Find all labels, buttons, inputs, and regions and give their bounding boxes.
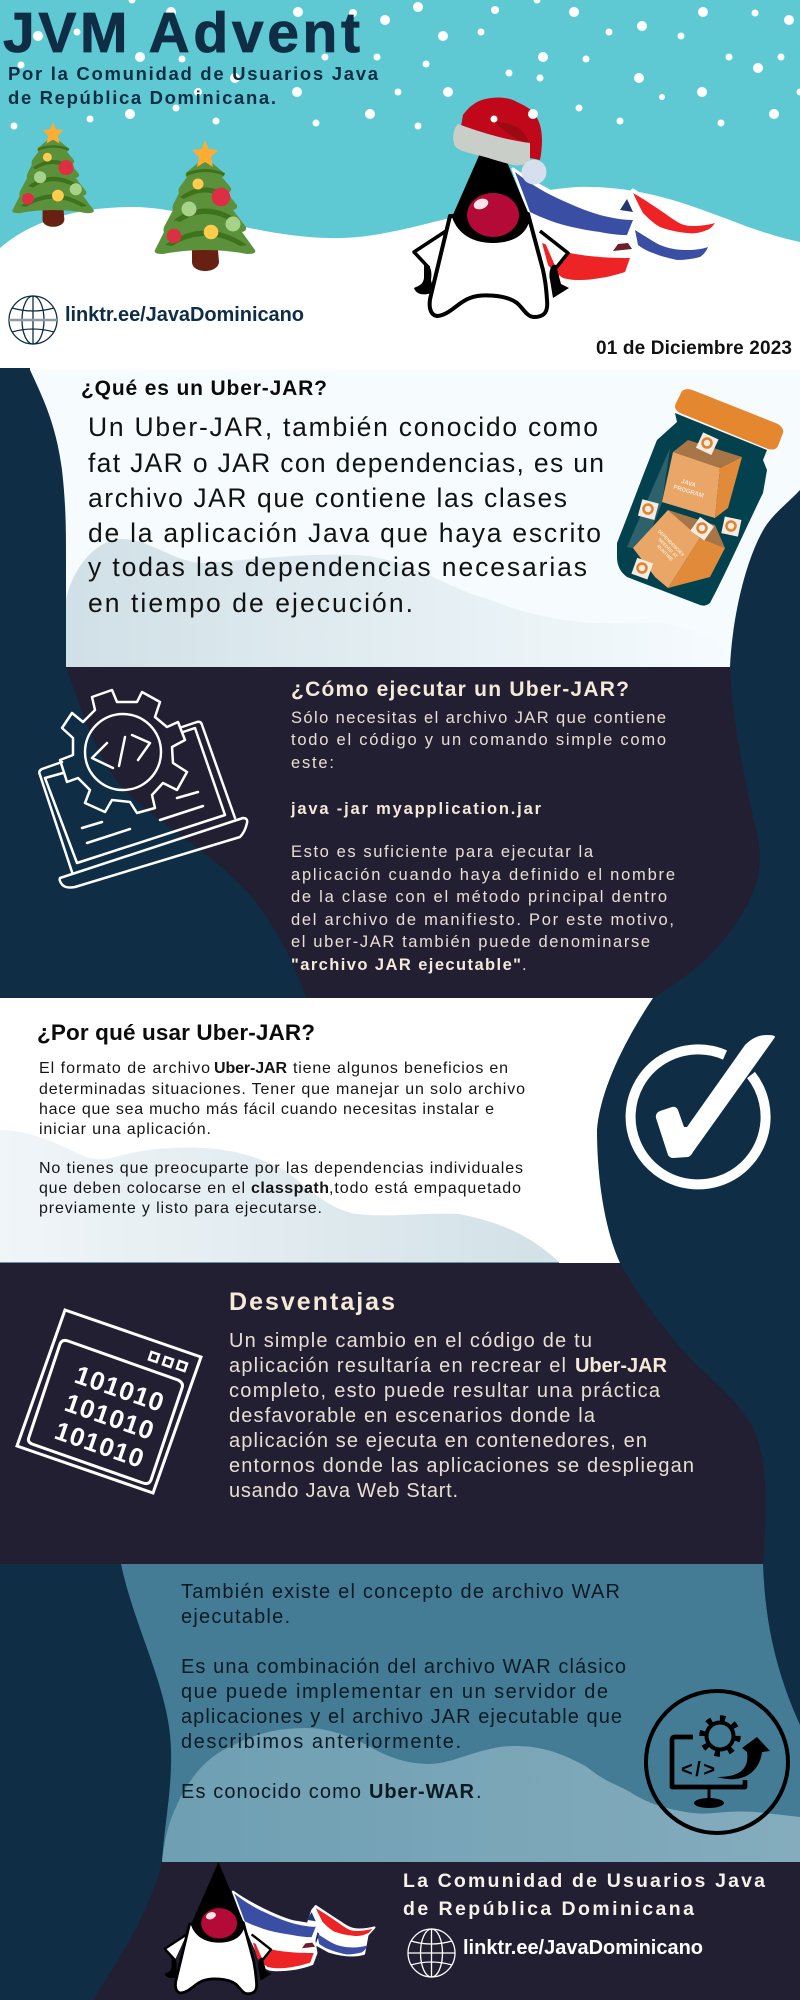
text block: que puede implementar en un servidor de	[181, 1681, 608, 1703]
text block: aplicación se ejecuta en contenedores, en	[229, 1430, 647, 1452]
panel: ¿Cómo ejecutar un Uber-JAR?	[39, 667, 760, 998]
snow hill	[0, 187, 800, 370]
text block: classpath	[251, 1180, 329, 1197]
text block: previamente y listo para ejecutarse.	[39, 1200, 322, 1217]
heading: ¿Cómo ejecutar un Uber-JAR?	[291, 678, 629, 701]
text block: iniciar una aplicación.	[39, 1121, 211, 1138]
icon: dominican flag	[513, 169, 718, 283]
text block: tiene algunos beneficios en	[293, 1060, 508, 1077]
paragraph: fat JAR o JAR con dependencias, es un	[88, 448, 604, 478]
text block	[39, 1060, 525, 1217]
subtitle: de República Dominicana.	[8, 87, 276, 108]
panel: footer	[93, 1862, 800, 2000]
text block: No tienes que preocuparte por las dependencias individuales	[39, 1160, 523, 1177]
text block: .	[476, 1781, 482, 1803]
heading: de República Dominicana	[403, 1898, 694, 1920]
text block: Un simple cambio en el código de tu	[229, 1330, 592, 1352]
panel: Uber-WAR	[121, 1564, 800, 1862]
icon: binary code window: 101010	[61, 1387, 158, 1446]
paragraph: Un Uber-JAR, también conocido como	[88, 412, 598, 442]
panel: Desventajas	[0, 1263, 766, 1564]
text block: determinadas situaciones. Tener que manejar un solo archivo	[39, 1081, 525, 1098]
text block: hace que sea mucho más fácil cuando necesitas instalar e	[39, 1101, 494, 1118]
text block: aplicación cuando haya definido el nombre	[291, 866, 675, 884]
panel: header	[0, 0, 800, 370]
paragraph: y todas las dependencias necesarias	[88, 552, 587, 582]
icon: Duke mascot with santa hat	[414, 97, 569, 317]
text block: Esto es suficiente para ejecutar la	[291, 843, 594, 861]
icon: small christmas tree	[12, 122, 94, 227]
text block: Uber-WAR	[369, 1781, 475, 1803]
text block: aplicación resultaría en recrear el	[229, 1355, 566, 1377]
text block: de la clase con el método principal dentro	[291, 888, 667, 906]
icon: large christmas tree	[155, 140, 255, 271]
text block: .	[522, 956, 527, 974]
text block: Uber-JAR	[575, 1355, 668, 1377]
icon: jar with boxes: DEPENDENCIES	[657, 529, 685, 557]
text block: "archivo JAR ejecutable"	[291, 956, 521, 974]
icon: jar with boxes: PROGRAM	[672, 485, 704, 499]
icon: binary code window: 101010	[51, 1415, 148, 1474]
icon: laptop with gear and code	[39, 690, 247, 888]
subtitle: Por la Comunidad de Usuarios Java	[8, 63, 379, 84]
icon: Duke mascot with flag	[165, 1862, 374, 1994]
subtitle	[8, 63, 379, 108]
text block: java -jar myapplication.jar	[290, 800, 542, 818]
text block: usando Java Web Start.	[229, 1480, 458, 1502]
heading: ¿Por qué usar Uber-JAR?	[37, 1020, 315, 1045]
text block: desfavorable en escenarios donde la	[229, 1405, 596, 1427]
text block	[290, 709, 675, 974]
text block: este:	[291, 754, 334, 772]
icon: jar with boxes: NEEDED AT	[657, 537, 679, 559]
text block: describimos anteriormente.	[181, 1731, 461, 1753]
icon: jar with boxes: RUNTIME	[656, 544, 674, 562]
panel: ¿Por qué usar Uber-JAR?	[0, 998, 775, 1264]
paragraph: de la aplicación Java que haya escrito	[88, 518, 601, 548]
icon: globe	[9, 296, 57, 344]
heading	[403, 1870, 765, 1920]
icon: binary code window: 101010	[71, 1359, 168, 1418]
date: 01 de Diciembre 2023	[596, 338, 792, 359]
icon: jar with boxes	[617, 389, 783, 606]
icon: monitor with gear and arrow	[646, 1691, 788, 1833]
paragraph: archivo JAR que contiene las clases	[88, 483, 567, 513]
text block: que deben colocarse en el	[39, 1180, 245, 1197]
link text: linktr.ee/JavaDominicano	[65, 304, 304, 326]
text block	[181, 1581, 626, 1803]
text block: entornos donde las aplicaciones se despliegan	[229, 1455, 694, 1477]
text block: Es conocido como	[181, 1781, 361, 1803]
title: JVM Advent	[3, 1, 360, 65]
text block: completo, esto puede resultar una práctica	[229, 1380, 661, 1402]
panel: ¿Qué es un Uber-JAR?	[30, 370, 800, 667]
text block: aplicaciones y el archivo JAR ejecutable que	[181, 1706, 622, 1728]
heading: ¿Qué es un Uber-JAR?	[81, 377, 327, 400]
text block: el uber-JAR también puede denominarse	[291, 933, 650, 951]
icon: jar with boxes: JAVA	[680, 479, 697, 489]
text block: ejecutable.	[181, 1606, 290, 1628]
paragraph: en tiempo de ejecución.	[88, 588, 413, 618]
text block: ,todo está empaquetado	[329, 1180, 521, 1197]
icon: globe	[408, 1929, 455, 1977]
icon: monitor with gear and arrow: </>	[681, 1759, 715, 1781]
snowflakes	[10, 0, 800, 130]
text block	[229, 1330, 694, 1502]
heading: Desventajas	[229, 1288, 395, 1316]
heading: La Comunidad de Usuarios Java	[403, 1870, 765, 1892]
text block: Uber-JAR	[214, 1060, 287, 1077]
icon: check mark in circle	[631, 1035, 775, 1184]
icon: binary code window	[17, 1310, 201, 1493]
text block: del archivo de manifiesto. Por este motivo,	[291, 911, 674, 929]
text block: El formato de archivo	[39, 1060, 210, 1077]
text block: Sólo necesitas el archivo JAR que contiene	[291, 709, 666, 727]
paragraph	[88, 412, 604, 618]
text block: Es una combinación del archivo WAR clásico	[181, 1656, 626, 1678]
text block: todo el código y un comando simple como	[291, 731, 666, 749]
link text: linktr.ee/JavaDominicano	[463, 1937, 703, 1959]
text block: También existe el concepto de archivo WAR	[181, 1581, 620, 1603]
